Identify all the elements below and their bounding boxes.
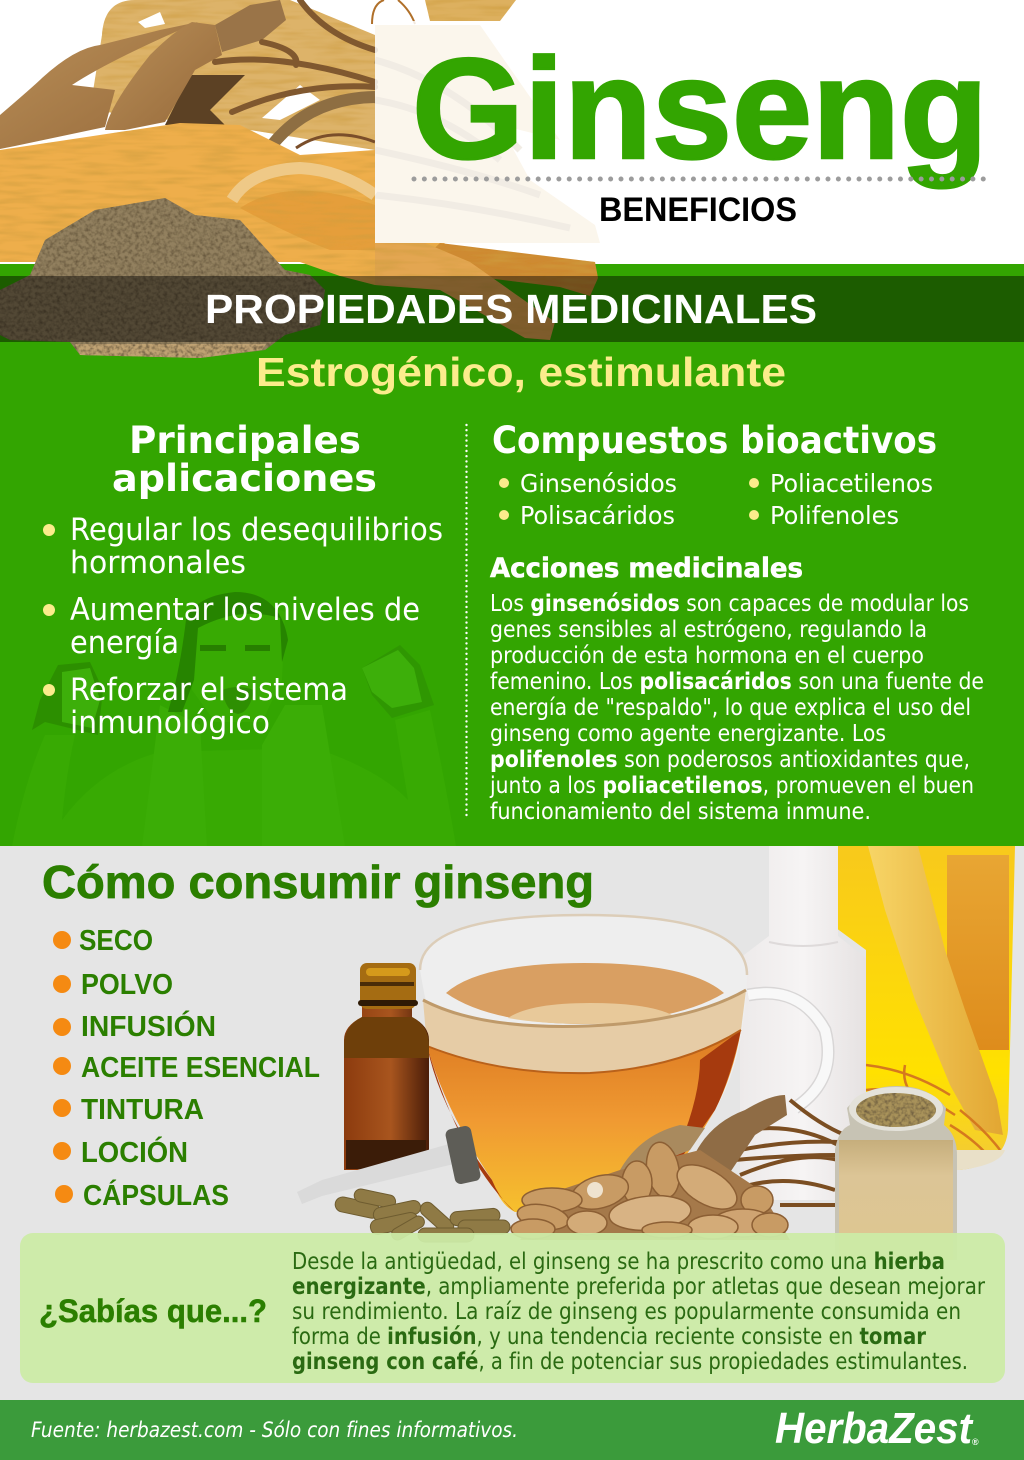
callout: sabias que: Desde la antigüedad, el ginseng se ha prescrito como una hierba: [292, 1249, 945, 1275]
list: formas de consumo: [53, 925, 320, 1212]
heading: como consumir ginseng: Cómo consumir ginseng: [42, 856, 594, 908]
callout: sabias que: ¿Sabías que...?: [39, 1293, 267, 1329]
callout: sabias que: forma de infusión, y una tendencia reciente consiste en tomar: [292, 1324, 927, 1350]
towel: [142, 705, 345, 846]
list: formas de consumo: POLVO: [81, 969, 173, 1001]
text block: acciones medicinales: genes sensibles al estrógeno, regulando la: [490, 617, 927, 643]
tincture jar with root: [832, 846, 1015, 1170]
panel: principales aplicaciones: energía: [70, 625, 179, 661]
title: Ginseng: [412, 30, 988, 189]
tan roots behind: [90, 0, 375, 150]
face: [186, 598, 285, 722]
panel: compuestos bioactivos: Ginsenósidos: [520, 469, 677, 498]
glass cup of tea: [420, 915, 828, 1212]
faint roots under the panel: [375, 25, 600, 243]
text block: acciones medicinales: Los ginsenósidos son capaces de modular los: [490, 591, 969, 617]
footer: [0, 1400, 1024, 1460]
logo: HerbaZest: HerbaZest: [775, 1404, 974, 1453]
translucent title panel: [375, 21, 640, 243]
list: formas de consumo: SECO: [79, 925, 153, 957]
amber essential oil bottle: [344, 963, 429, 1170]
subtitle: Estrogénico, estimulante: [256, 349, 786, 395]
panel: principales aplicaciones: Reforzar el sistema: [70, 672, 348, 708]
text block: acciones medicinales: junto a los poliacetilenos, promueven el buen: [489, 773, 974, 799]
footer: Fuente: herbazest.com - Sólo con fines informativos.: [31, 1418, 518, 1442]
panel: principales aplicaciones: aplicaciones: [112, 457, 377, 500]
right fist: [362, 645, 434, 718]
text block: acciones medicinales: ginseng como agente energizante. Los: [490, 721, 886, 747]
glass dropper: [297, 1125, 482, 1204]
capsules: [334, 1188, 510, 1242]
panel: compuestos bioactivos: Poliacetilenos: [770, 469, 933, 498]
list: formas de consumo: INFUSIÓN: [81, 1009, 216, 1043]
ginseng root pile: [511, 1095, 845, 1240]
image: woman with raised fists in green duotone: [12, 592, 456, 846]
panel: principales aplicaciones: inmunológico: [70, 705, 270, 741]
list: formas de consumo: CÁPSULAS: [83, 1178, 229, 1212]
text block: acciones medicinales: energía de "respaldo", lo que explica el uso del: [490, 695, 971, 721]
panel: principales aplicaciones: Aumentar los niveles de: [70, 592, 420, 628]
left fist: [32, 662, 103, 735]
image: ginseng products: [297, 846, 1015, 1260]
arms and shoulders: [12, 710, 456, 846]
list: formas de consumo: TINTURA: [81, 1094, 204, 1126]
list: formas de consumo: LOCIÓN: [81, 1135, 188, 1169]
jar of ginseng powder: [835, 1086, 957, 1260]
chopped root pile: [0, 198, 325, 358]
callout: sabias que: [20, 1233, 1005, 1383]
panel: principales aplicaciones: [43, 419, 443, 741]
panel: compuestos bioactivos: Polifenoles: [770, 501, 899, 530]
panel: principales aplicaciones: Principales: [129, 419, 361, 462]
brown roots: [0, 22, 198, 149]
text block: acciones medicinales: funcionamiento del sistema inmune.: [490, 799, 871, 825]
band: propiedades medicinales: PROPIEDADES MEDICINALES: [205, 286, 817, 332]
logo: HerbaZest: ®: [972, 1437, 979, 1447]
panel: principales aplicaciones: Regular los desequilibrios: [70, 512, 443, 548]
panel: principales aplicaciones: hormonales: [70, 545, 246, 581]
roots below the panel: [375, 243, 598, 340]
band: propiedades medicinales: [0, 276, 1024, 342]
text block: acciones medicinales: [489, 553, 984, 825]
text block: acciones medicinales: femenino. Los polisacáridos son una fuente de: [490, 669, 984, 695]
image: ginseng roots and chopped root pile: [0, 0, 640, 358]
orange slab: [0, 123, 445, 285]
title: BENEFICIOS: [599, 191, 797, 229]
text block: acciones medicinales: polifenoles son poderosos antioxidantes que,: [490, 747, 970, 773]
text block: acciones medicinales: producción de esta hormona en el cuerpo: [490, 643, 924, 669]
white lotion bottle: [740, 846, 866, 1200]
list: formas de consumo: ACEITE ESENCIAL: [81, 1052, 320, 1084]
text block: acciones medicinales: Acciones medicinales: [490, 553, 803, 584]
panel: compuestos bioactivos: [492, 419, 937, 530]
panel: compuestos bioactivos: Compuestos bioactivos: [492, 419, 937, 462]
panel: compuestos bioactivos: Polisacáridos: [520, 501, 675, 530]
